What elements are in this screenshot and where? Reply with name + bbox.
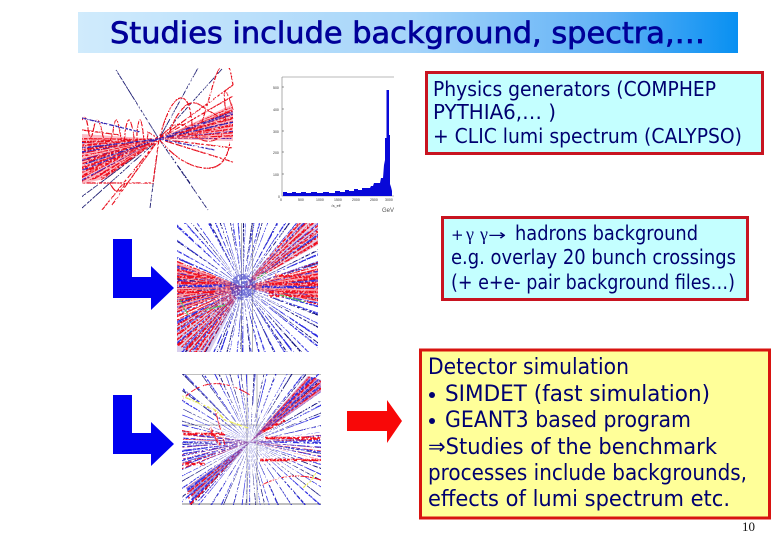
event display 2: with hadron background overlay bbox=[177, 223, 318, 352]
axis unit: GeV bbox=[382, 208, 394, 214]
panel: detector simulation bbox=[420, 350, 770, 518]
background text: hadrons background bbox=[515, 221, 698, 245]
axis labels: 500 bbox=[298, 198, 304, 202]
axis labels: 1500 bbox=[334, 198, 342, 202]
background text: γ bbox=[479, 224, 488, 244]
axis labels: 100 bbox=[273, 173, 279, 177]
background text: → bbox=[488, 226, 506, 244]
generator text: PYTHIA6,… ) bbox=[433, 100, 556, 124]
title banner bbox=[78, 12, 738, 53]
background text bbox=[451, 221, 736, 294]
axis labels: 400 bbox=[273, 108, 279, 112]
axis labels: 300 bbox=[273, 130, 279, 134]
axis labels: 200 bbox=[273, 151, 279, 155]
detector text: effects of lumi spectrum etc. bbox=[428, 487, 730, 512]
detector text: processes include backgrounds, bbox=[428, 461, 747, 486]
blue arrow 1 bbox=[113, 239, 174, 310]
red arrow bbox=[347, 400, 402, 443]
axis labels: 1000 bbox=[316, 198, 324, 202]
blue arrow 2 bbox=[113, 395, 174, 466]
axis labels: 500 bbox=[273, 86, 279, 90]
axis labels: 3000 bbox=[385, 198, 393, 202]
generator text: + CLIC lumi spectrum (CALYPSO) bbox=[433, 124, 742, 148]
axis labels: √s_eff bbox=[331, 204, 340, 208]
page number: 10 bbox=[742, 519, 755, 534]
axis labels bbox=[273, 86, 393, 208]
background text: + bbox=[451, 226, 464, 244]
background text: (+ e+e- pair background files…) bbox=[451, 270, 735, 294]
title text: Studies include background, spectra,… bbox=[110, 16, 705, 50]
detector text: SIMDET (fast simulation) bbox=[445, 382, 710, 407]
histogram bars bbox=[283, 90, 392, 196]
detector text: ⇒Studies of the benchmark bbox=[428, 435, 717, 460]
axis labels: 0 bbox=[280, 198, 282, 202]
axis labels: 2500 bbox=[370, 198, 378, 202]
panel: hadron background bbox=[442, 218, 748, 300]
energy spectrum histogram bbox=[273, 77, 394, 214]
event display 1: generator level tracks bbox=[80, 63, 233, 210]
event display 3: detector simulation bbox=[182, 374, 321, 505]
axis labels: 2000 bbox=[352, 198, 360, 202]
panel: physics generators bbox=[426, 72, 762, 154]
detector text: GEANT3 based program bbox=[445, 408, 691, 433]
generator text bbox=[433, 77, 742, 148]
background text: e.g. overlay 20 bunch crossings bbox=[451, 245, 736, 269]
detector text bbox=[428, 355, 747, 512]
axis labels: 0 bbox=[278, 195, 280, 199]
background text: γ bbox=[465, 224, 474, 244]
detector text: Detector simulation bbox=[428, 355, 629, 380]
generator text: Physics generators (COMPHEP bbox=[433, 77, 716, 101]
